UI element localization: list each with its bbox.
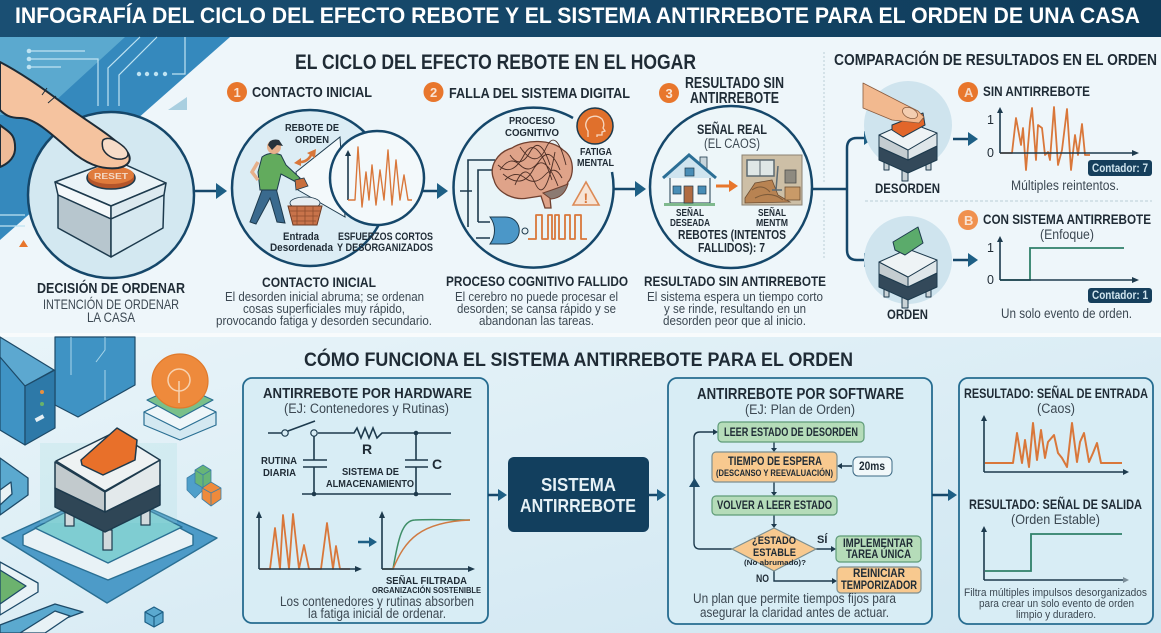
icon: brain (492, 140, 572, 208)
heading B: B (964, 213, 973, 228)
box: tiempo de espera: TIEMPO DE ESPERA (728, 456, 822, 468)
caption: resultado (644, 273, 826, 328)
step 3 heading: RESULTADO SIN (685, 75, 784, 92)
RC circuit: C (432, 456, 442, 472)
caption: contacto inicial: CONTACTO INICIAL (262, 274, 376, 290)
arrow: hardware to system (488, 489, 507, 501)
step 1 heading: CONTACTO INICIAL (252, 84, 372, 101)
box: tiempo de espera: (DESCANSO Y REEVALUACIÓN) (716, 467, 833, 479)
panel: software: (EJ: Plan de Orden) (745, 402, 855, 417)
arrow: failure to result (613, 181, 646, 197)
switch body (55, 428, 160, 532)
icon: finger on switch (863, 83, 924, 123)
panel: hardware: SEÑAL FILTRADA (386, 574, 467, 587)
labels: DESEADA (670, 218, 710, 229)
box: volver a leer (712, 496, 837, 515)
arrow: decision to contact (195, 183, 227, 199)
text: multiples reintentos: Múltiples reintentos. (1011, 178, 1119, 193)
RC circuit: DIARIA (263, 467, 296, 479)
badge: contador 7: Contador: 7 (1092, 163, 1148, 175)
panel: falla digital circle (453, 107, 615, 268)
icon: laundry basket (288, 197, 322, 225)
RC circuit: ALMACENAMIENTO (326, 478, 414, 490)
panel: hardware: (EJ: Contenedores y Rutinas) (284, 401, 449, 416)
chart: filtered signal (379, 511, 475, 572)
box: implementar (836, 536, 921, 562)
caption: decision (37, 279, 185, 325)
caption: proceso cognitivo (446, 273, 628, 328)
pulse signal (528, 215, 587, 239)
decision diamond: (No abrumado)? (744, 558, 806, 567)
box: volver a leer: VOLVER A LEER ESTADO (717, 500, 832, 512)
labels: SEÑAL REAL (697, 120, 767, 137)
badge: contador 1: Contador: 1 (1092, 290, 1149, 302)
labels (505, 115, 615, 169)
panel: contacto inicial circle (232, 110, 433, 266)
caption: resultado: RESULTADO SIN ANTIRREBOTE (644, 273, 826, 289)
chart: input signal (981, 415, 1129, 475)
labels: MENTM (756, 218, 788, 229)
step 3 heading (659, 75, 784, 107)
pins (65, 510, 150, 550)
box: implementar: IMPLEMENTAR (843, 538, 914, 550)
title banner (0, 0, 1161, 37)
labels: (EL CAOS) (704, 136, 760, 151)
chart: con sistema signal (987, 236, 1139, 287)
icon: circuit lines (460, 160, 495, 238)
RC circuit (261, 421, 451, 496)
caption: decision: DECISIÓN DE ORDENAR (37, 279, 185, 297)
arrow: branching to comparison (813, 131, 874, 267)
icon: person tidying (250, 140, 308, 224)
title banner: INFOGRAFÍA DEL CICLO DEL EFECTO REBOTE Y EL SISTEMA ANTIRREBOTE PARA EL ORDEN DE UNA CASA (15, 3, 1140, 28)
panel: desorden switch (863, 81, 952, 181)
box: implementar: TAREA ÚNICA (846, 548, 911, 561)
heading A: SIN ANTIRREBOTE (983, 83, 1090, 99)
icon: messy room (742, 155, 802, 205)
panel: software: ANTIRREBOTE POR SOFTWARE (697, 386, 904, 403)
step 1 heading: 1 (234, 85, 241, 100)
panel: results: Filtra múltiples impulsos desorganizados (964, 587, 1147, 599)
circle labels: REBOTE DE (285, 122, 339, 134)
caption: proceso cognitivo: El cerebro no puede procesar el (455, 289, 618, 304)
arrow: to chart A (953, 132, 978, 146)
panel: hardware (243, 378, 488, 623)
icon: reset box (55, 160, 166, 257)
glow panel (40, 443, 177, 523)
flowchart connectors (689, 429, 852, 584)
arrow: system to software (649, 489, 666, 501)
section divider (823, 52, 825, 260)
panel: results (959, 378, 1153, 624)
arrow: to chart B (953, 253, 978, 267)
labels: SEÑAL (758, 206, 786, 219)
chart: output signal (981, 526, 1129, 583)
step 3 heading: ANTIRREBOTE (690, 90, 779, 107)
step 3 heading: 3 (666, 86, 673, 101)
caption: decision: INTENCIÓN DE ORDENAR (43, 296, 179, 312)
panel: software: asegurar la claridad antes de actuar. (700, 605, 889, 620)
icon: warning triangle: ! (584, 190, 588, 206)
step 2 heading: FALLA DEL SISTEMA DIGITAL (449, 85, 630, 102)
illustration: isometric switch scene (0, 337, 221, 633)
icon: orange bounce arrow (294, 149, 316, 166)
box: leer estado: LEER ESTADO DE DESORDEN (724, 425, 858, 439)
base slabs (2, 490, 217, 603)
box: leer estado (718, 422, 864, 442)
labels: MENTAL (577, 157, 615, 169)
box: reiniciar: REINICIAR (853, 568, 906, 580)
heading B (958, 210, 1151, 242)
icon: warning triangle (573, 182, 599, 206)
box: 20ms: 20ms (859, 461, 885, 473)
caption: resultado: desorden peor que al inicio. (663, 313, 806, 328)
decorative circuit background (0, 37, 230, 247)
circle labels: Entrada (283, 231, 320, 243)
caption: contacto inicial: cosas superficiales muy rápido, (243, 301, 405, 316)
decision diamond: ESTABLE (753, 547, 796, 559)
central block: sistema antirrebote: SISTEMA (541, 474, 616, 495)
text: un solo evento: Un solo evento de orden. (1001, 306, 1132, 321)
step 1 heading (227, 82, 372, 102)
caption: proceso cognitivo: abandonan las tareas. (479, 313, 594, 328)
panel: hardware: ANTIRREBOTE POR HARDWARE (263, 385, 472, 402)
panel: software (668, 378, 932, 624)
caption: proceso cognitivo: desorden; se cansa rápido y se (457, 301, 616, 316)
labels (670, 120, 788, 255)
RC circuit: RUTINA (261, 455, 297, 467)
box: 20ms (853, 457, 892, 476)
chart: sin antirrebote signal (987, 107, 1139, 170)
arrow: contact to failure (423, 183, 448, 199)
step 2 heading (424, 82, 630, 102)
decision diamond: ¿ESTADO (752, 535, 796, 547)
section heading: ciclo: EL CICLO DEL EFECTO REBOTE EN EL HOGAR (295, 51, 696, 74)
label: orden: ORDEN (887, 307, 928, 322)
step 2 heading: 2 (430, 85, 437, 100)
arrow: house to chaos (716, 180, 738, 192)
circle labels: Y DESORGANIZADOS (337, 242, 433, 254)
small cubes (187, 465, 221, 506)
circle labels: Desordenada (270, 242, 334, 254)
panel: hardware: ORGANIZACIÓN SOSTENIBLE (372, 584, 481, 595)
label: desorden: DESORDEN (875, 181, 940, 196)
RC circuit: SISTEMA DE (342, 466, 399, 478)
circle labels (270, 122, 433, 254)
labels: PROCESO (509, 115, 555, 127)
chart: con sistema signal: 0 (987, 273, 994, 287)
heading B: (Enfoque) (1040, 227, 1094, 242)
side panels (0, 458, 83, 633)
labels: SEÑAL (676, 206, 704, 219)
labels: FALLIDOS): 7 (698, 241, 765, 255)
badge: contador 7 (1088, 160, 1152, 176)
server towers (0, 337, 135, 445)
box: tiempo de espera (712, 452, 837, 482)
caption: resultado: El sistema espera un tiempo corto (647, 289, 823, 304)
label: no: NO (756, 573, 769, 585)
caption: proceso cognitivo: PROCESO COGNITIVO FALLIDO (446, 273, 628, 289)
arrow: software to results (932, 489, 957, 501)
chart: con sistema signal: 1 (987, 241, 994, 255)
panel: results: limpio y duradero. (1016, 609, 1096, 621)
circle labels: ORDEN (295, 134, 329, 146)
panel: orden switch (864, 216, 952, 308)
box: reiniciar (837, 567, 921, 593)
magnifier chart (330, 131, 424, 225)
central block: sistema antirrebote: ANTIRREBOTE (520, 495, 636, 516)
caption: contacto inicial: provocando fatiga y desorden secundario. (216, 313, 432, 328)
label: si: SÍ (817, 533, 828, 546)
chart: sin antirrebote signal: 0 (987, 146, 994, 160)
icon: house (663, 155, 716, 206)
panel: results: (Orden Estable) (1011, 511, 1100, 527)
central block: sistema antirrebote (508, 457, 649, 532)
labels: REBOTES (INTENTOS (678, 228, 786, 242)
labels: FATIGA (580, 146, 612, 158)
panel: software: Un plan que permite tiempos fijos para (693, 591, 896, 606)
panel: results: para crear un solo evento de orden (979, 598, 1134, 610)
RC circuit: R (362, 441, 372, 457)
panel: decision de ordenar: RESET (94, 172, 128, 181)
caption: contacto inicial (216, 274, 432, 328)
panel: hardware: la fatiga inicial de ordenar. (308, 606, 446, 621)
icon: fatigue head (577, 108, 613, 144)
icon: pressing finger (0, 62, 130, 168)
panel: hardware: Los contenedores y rutinas absorben (280, 594, 474, 609)
labels: COGNITIVO (505, 127, 559, 139)
panel: resultado sin antirrebote circle (650, 106, 812, 268)
box: reiniciar: TEMPORIZADOR (841, 580, 918, 592)
panel: decision de ordenar (0, 62, 194, 278)
caption: decision: LA CASA (87, 309, 136, 325)
arrow: filter (358, 537, 377, 547)
heading A (958, 82, 1090, 102)
heading A: A (964, 85, 974, 100)
decision diamond (732, 528, 816, 571)
orange disc stack (144, 354, 216, 440)
panel: results: (Caos) (1037, 401, 1075, 416)
heading: como funciona: CÓMO FUNCIONA EL SISTEMA ANTIRREBOTE PARA EL ORDEN (304, 349, 853, 371)
caption: contacto inicial: El desorden inicial abruma; se ordenan (225, 289, 424, 304)
icon: NAND gate (490, 217, 528, 244)
caption: resultado: y se rinde, resultando en un (664, 301, 806, 316)
circle labels: ESFUERZOS CORTOS (338, 231, 433, 243)
chart: raw pulses (256, 511, 362, 572)
chart: sin antirrebote signal: 1 (987, 113, 994, 127)
